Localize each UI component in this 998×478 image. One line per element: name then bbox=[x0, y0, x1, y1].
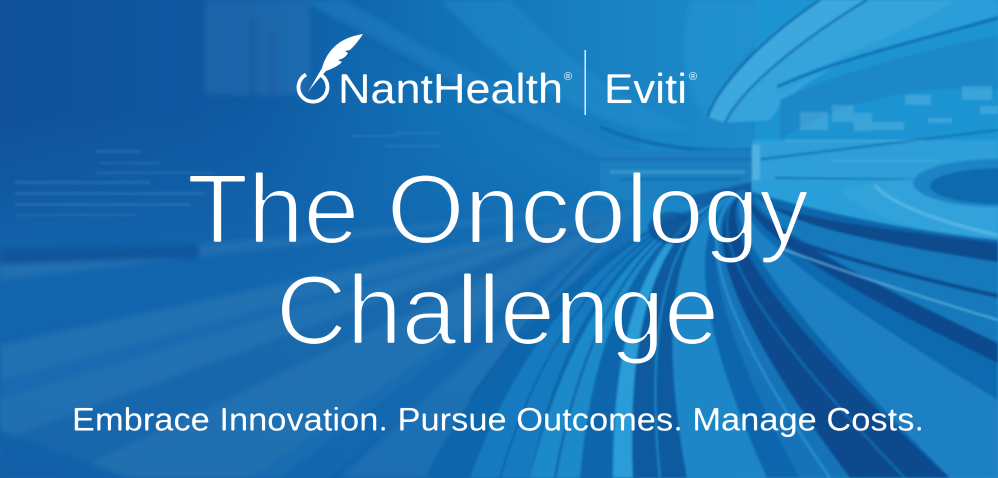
left side: blurred light dashes bbox=[15, 132, 440, 216]
wordmark: NantHealth: NantHealth bbox=[338, 65, 563, 112]
registered mark: ® bbox=[564, 71, 572, 83]
icon: quill and ring bbox=[298, 34, 363, 102]
tagline: Embrace Innovation. Pursue Outcomes. Manage Costs. bbox=[72, 402, 924, 438]
top: diagonal sweep and tunnel ceiling bbox=[300, 0, 790, 170]
center: horizontal speed lines bbox=[600, 158, 752, 206]
registered mark: ® bbox=[689, 71, 697, 83]
title: The Oncology bbox=[187, 154, 809, 264]
divider bbox=[584, 50, 586, 115]
title: Challenge bbox=[276, 255, 719, 365]
left side: building blur and pale wedges bbox=[0, 0, 640, 478]
wordmark: Eviti: Eviti bbox=[604, 65, 687, 112]
title bbox=[187, 154, 809, 365]
top right: curved tunnel bands bbox=[600, 0, 998, 200]
top right: light window bars bbox=[785, 86, 998, 162]
logo: NantHealth and Eviti bbox=[298, 34, 697, 115]
right: curved disc and road bbox=[752, 159, 998, 245]
lower right: radiating streaks bbox=[425, 190, 998, 478]
